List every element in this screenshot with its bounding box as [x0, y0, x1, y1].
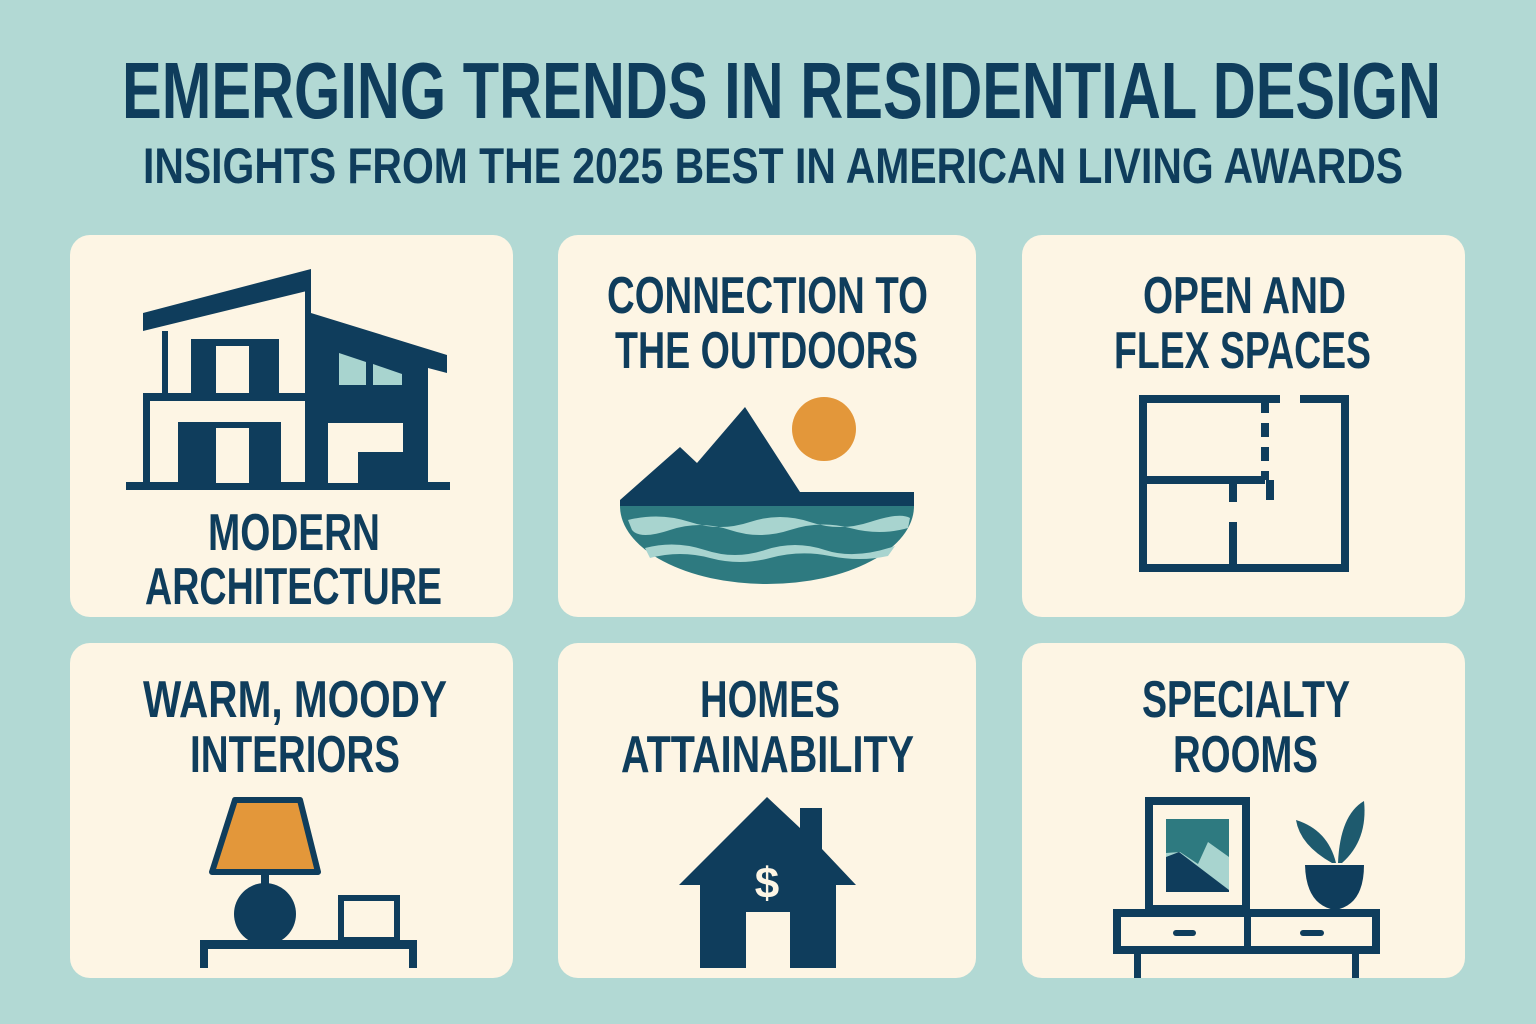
icon: lamp and table [200, 800, 417, 968]
icon: frame, plant and dresser [1117, 801, 1376, 978]
label: modern architecture: MODERN [208, 504, 380, 562]
label: warm moody interiors [143, 671, 447, 784]
panel: warm moody interiors [70, 643, 513, 978]
label: homes attainability [621, 671, 914, 784]
label: open and flex spaces: FLEX SPACES [1114, 322, 1371, 380]
icon: house with dollar: $ [755, 859, 779, 908]
label: specialty rooms: SPECIALTY [1142, 671, 1350, 729]
label: warm moody interiors: WARM, MOODY [143, 671, 447, 729]
label: homes attainability: HOMES [700, 671, 840, 729]
label: specialty rooms [1142, 671, 1350, 784]
panel: homes attainability [558, 643, 976, 978]
label: warm moody interiors: INTERIORS [190, 726, 400, 784]
icon: landscape [620, 397, 914, 584]
panel: connection to the outdoors [558, 235, 976, 617]
label: homes attainability: ATTAINABILITY [621, 726, 914, 784]
icon: house with dollar [679, 797, 856, 968]
panel: specialty rooms [1022, 643, 1465, 978]
label: connection to the outdoors [607, 267, 928, 380]
label: modern architecture [145, 504, 442, 616]
icon: floor plan [1143, 399, 1345, 568]
label: specialty rooms: ROOMS [1173, 726, 1318, 784]
panel: modern architecture [70, 235, 513, 617]
label: modern architecture: ARCHITECTURE [145, 558, 442, 616]
label: connection to the outdoors: CONNECTION TO [607, 267, 928, 325]
label: open and flex spaces [1114, 267, 1371, 380]
icon: modern house [126, 269, 450, 490]
label: open and flex spaces: OPEN AND [1143, 267, 1346, 325]
label: connection to the outdoors: THE OUTDOORS [615, 322, 918, 380]
panel: open and flex spaces [1022, 235, 1465, 617]
